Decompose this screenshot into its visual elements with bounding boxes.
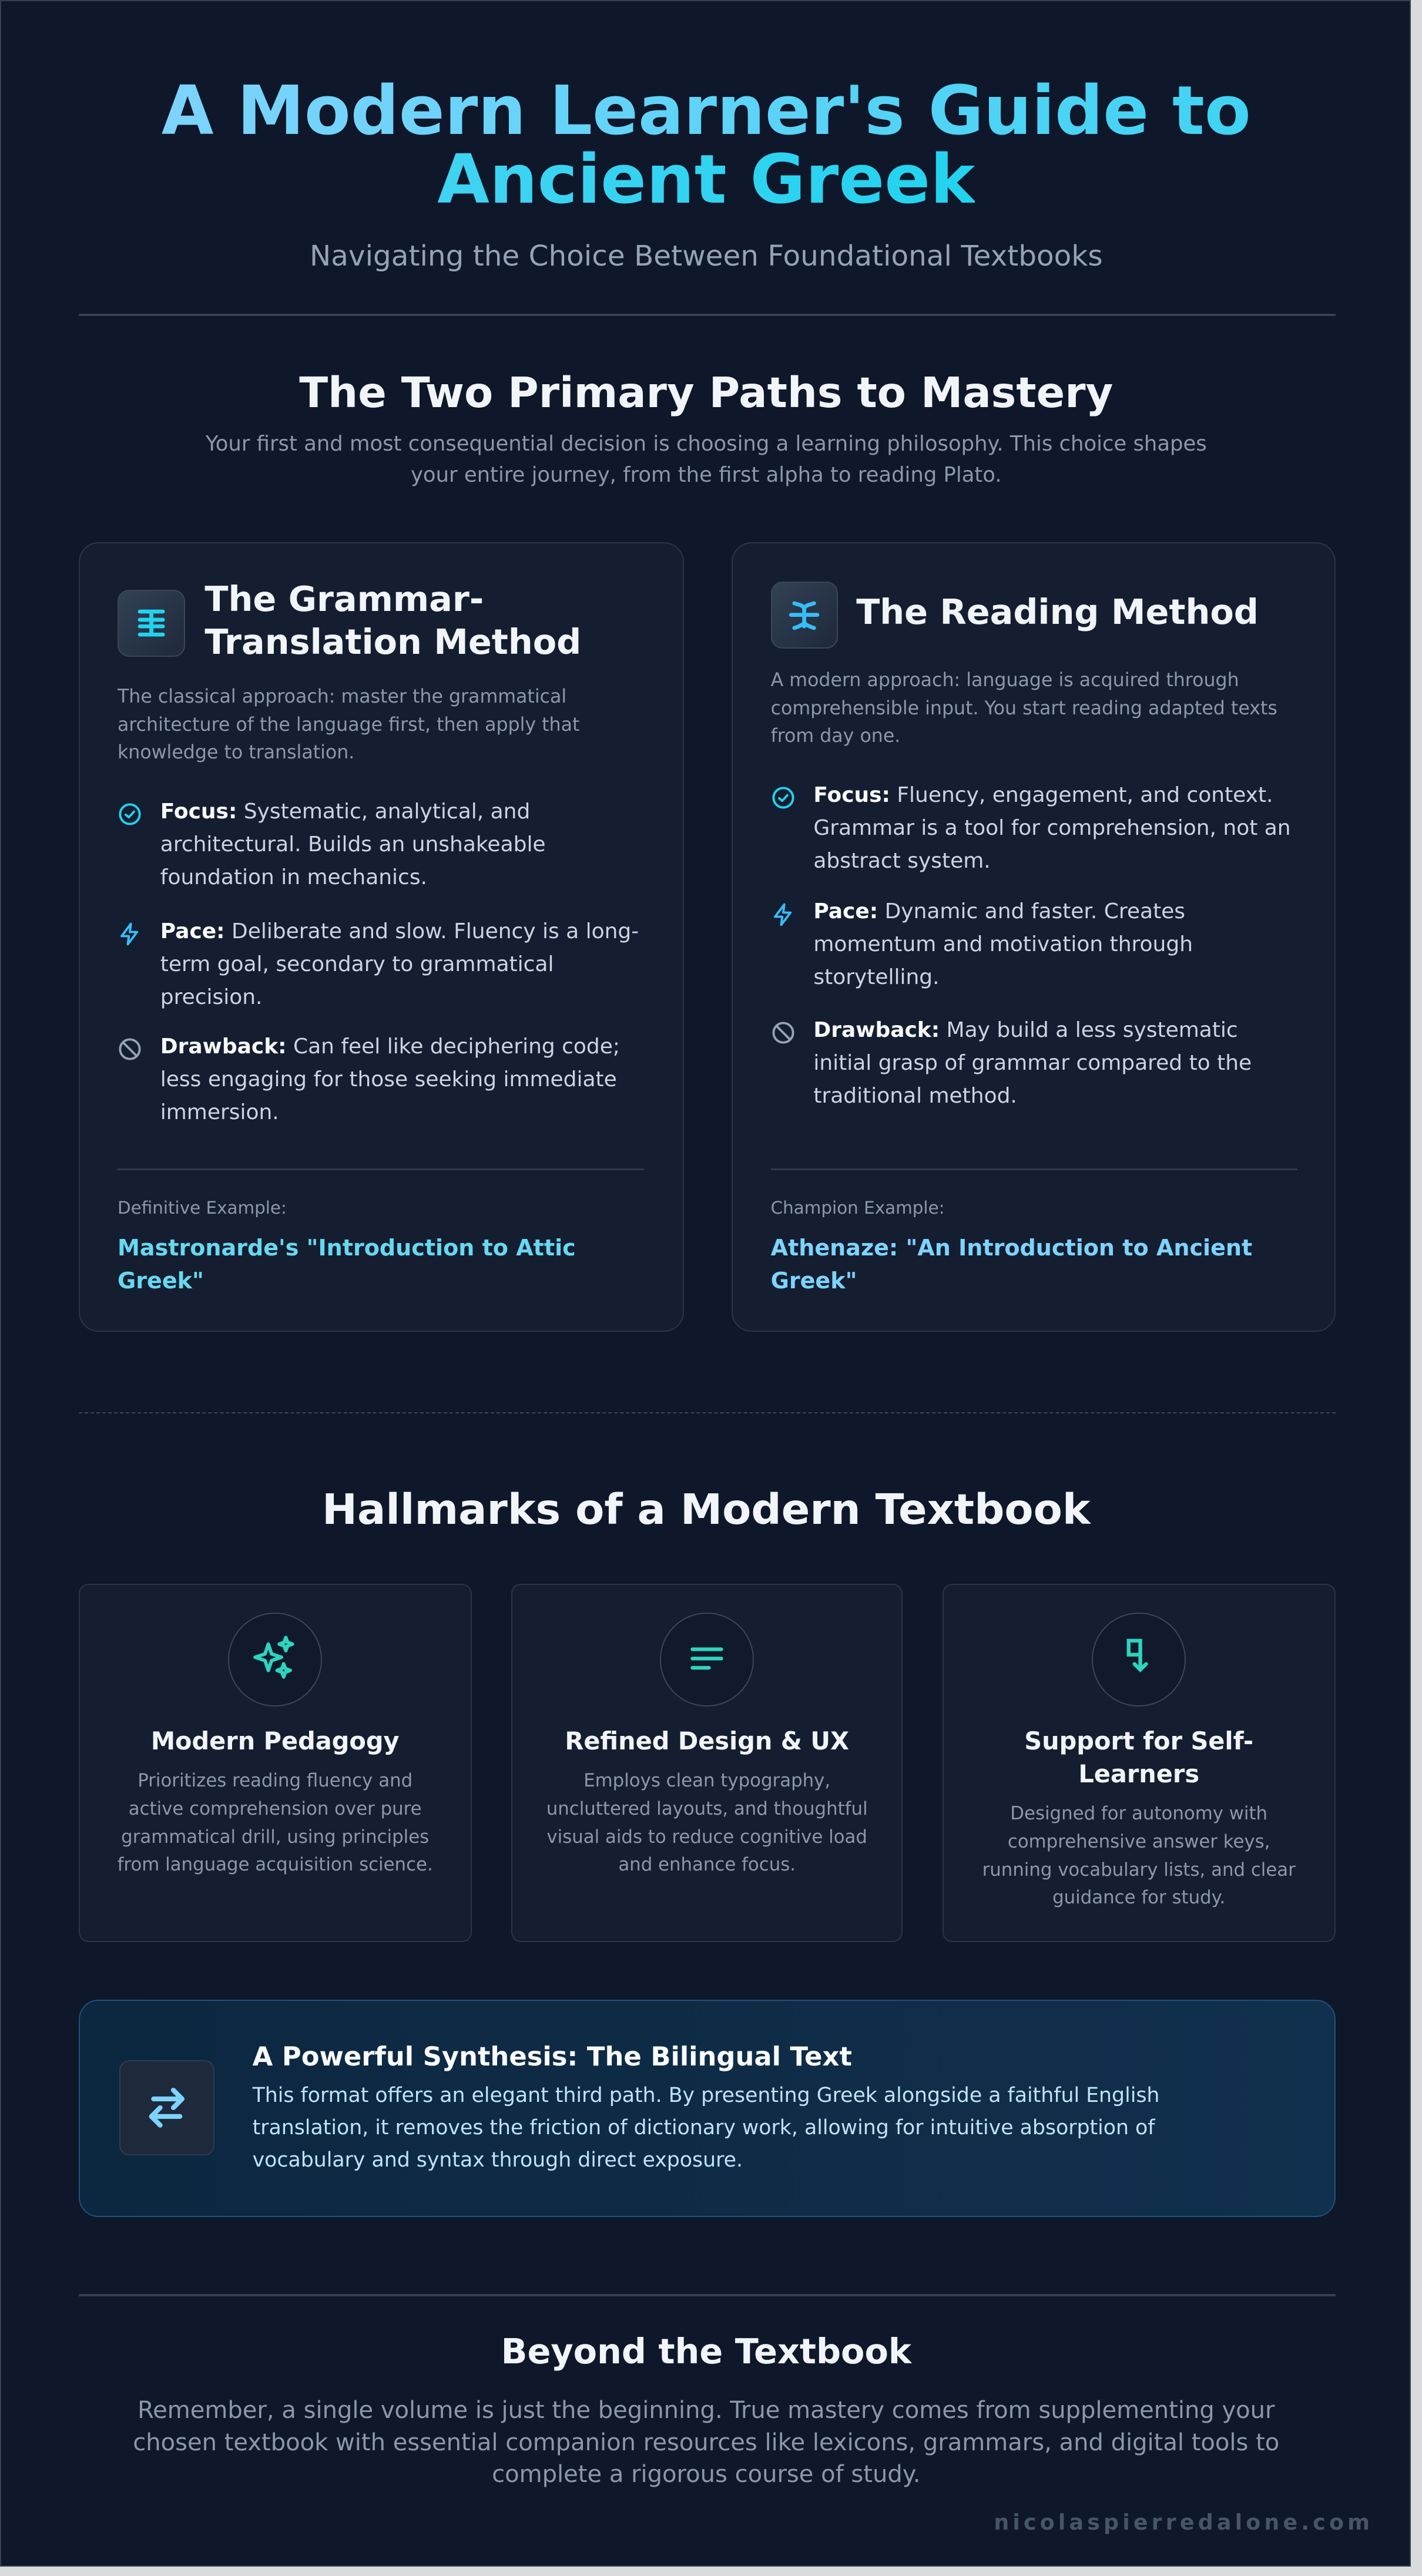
description: The classical approach: master the grammatical [118, 686, 566, 707]
text [118, 1770, 433, 1875]
example title [771, 1235, 1252, 1294]
callout: bilingual text [79, 2000, 1336, 2217]
description [118, 686, 579, 763]
bullet: drawback: immersion. [160, 1100, 279, 1124]
heading [204, 579, 581, 662]
title: Refined Design & UX [565, 1727, 849, 1755]
text: Designed for autonomy with [1010, 1803, 1267, 1824]
icon: grammar [118, 590, 185, 657]
closing paragraph: complete a rigorous course of study. [492, 2461, 920, 2488]
heading: The Grammar- [204, 579, 484, 619]
text: uncluttered layouts, and thoughtful [546, 1798, 868, 1819]
description: architecture of the language first, then apply that [118, 714, 579, 735]
description: A modern approach: language is acquired through [771, 670, 1239, 691]
heading: beyond: Beyond the Textbook [501, 2331, 911, 2372]
text: grammatical drill, using principles [121, 1826, 429, 1848]
text: comprehensive answer keys, [1008, 1831, 1270, 1852]
bullet: drawback: traditional method. [813, 1084, 1017, 1108]
text [982, 1803, 1296, 1908]
title [162, 72, 1251, 219]
example label: Definitive Example: [118, 1198, 287, 1218]
panel: grammar-translation card [79, 542, 684, 1332]
bullet: drawback: initial grasp of grammar compared to the [813, 1051, 1252, 1075]
icon: swap arrows [119, 2060, 214, 2155]
description: knowledge to translation. [118, 742, 354, 763]
text: Employs clean typography, [583, 1770, 830, 1791]
bullet: drawback [119, 1035, 620, 1124]
bullet: pace: momentum and motivation through [813, 932, 1193, 956]
bullet: pace: term goal, secondary to grammatical [160, 952, 554, 976]
bullet: pace: precision. [160, 985, 262, 1009]
bullet: focus [772, 783, 1291, 873]
example title: Mastronarde's "Introduction to Attic [118, 1235, 576, 1261]
description: comprehensible input. You start reading adapted texts [771, 698, 1277, 719]
bullet: focus: Grammar is a tool for comprehension, not an [813, 816, 1291, 840]
text [253, 2084, 1159, 2172]
panel: refined design [511, 1584, 903, 1942]
text: running vocabulary lists, and clear [982, 1859, 1296, 1880]
panel: reading method card [732, 542, 1336, 1332]
title: Support for Self- [1024, 1727, 1253, 1755]
text: visual aids to reduce cognitive load [546, 1826, 867, 1848]
bullet: pace: Pace: Deliberate and slow. Fluency is a long- [160, 919, 639, 943]
example label: Champion Example: [771, 1198, 945, 1218]
example title: Greek" [771, 1268, 857, 1294]
icon: lines [660, 1613, 754, 1707]
description [771, 670, 1277, 747]
example title [118, 1235, 576, 1294]
bullet: focus: architectural. Builds an unshakeable [160, 832, 546, 857]
title: Modern Pedagogy [151, 1727, 400, 1755]
text: This format offers an elegant third path. By presenting Greek alongside a faithful English [253, 2084, 1159, 2107]
title: A Modern Learner's Guide to [162, 72, 1251, 150]
bullet: drawback: less engaging for those seeking immediate [160, 1067, 617, 1091]
bullet: drawback: Drawback: May build a less systematic [813, 1018, 1238, 1042]
bullet: focus [119, 800, 546, 889]
title [1024, 1727, 1253, 1788]
text: guidance for study. [1052, 1887, 1225, 1908]
example title: Greek" [118, 1268, 204, 1294]
intro paragraph: Your first and most consequential decision is choosing a learning philosophy. This choice shapes [206, 432, 1207, 456]
bullet: pace [774, 899, 1193, 989]
text: and enhance focus. [618, 1854, 796, 1875]
bullet: pace [120, 919, 639, 1009]
heading: Translation Method [204, 622, 581, 662]
text: vocabulary and syntax through direct exposure. [253, 2148, 743, 2172]
bullet: pace: Pace: Dynamic and faster. Creates [813, 899, 1185, 923]
title: Ancient Greek [437, 140, 975, 219]
text: translation, it removes the friction of dictionary work, allowing for intuitive absorption of [253, 2116, 1155, 2140]
bullet: focus: Focus: Systematic, analytical, and [160, 800, 530, 824]
closing paragraph: chosen textbook with essential companion resources like lexicons, grammars, and digital tools to [133, 2429, 1279, 2456]
text [546, 1770, 868, 1875]
text: from language acquisition science. [118, 1854, 433, 1875]
heading: The Reading Method [856, 592, 1259, 632]
heading: two paths: The Two Primary Paths to Mastery [299, 368, 1113, 417]
text: active comprehension over pure [129, 1798, 422, 1819]
bullet: pace: storytelling. [813, 965, 940, 989]
text: Prioritizes reading fluency and [137, 1770, 412, 1791]
description: from day one. [771, 726, 900, 747]
subtitle: Navigating the Choice Between Foundational Textbooks [310, 240, 1103, 273]
closing paragraph [133, 2397, 1279, 2488]
heading: hallmarks: Hallmarks of a Modern Textbook [322, 1485, 1091, 1534]
bullet: focus: Focus: Fluency, engagement, and context. [813, 783, 1273, 807]
example title: Athenaze: "An Introduction to Ancient [771, 1235, 1252, 1261]
panel: self-learners [943, 1584, 1336, 1942]
bullet: drawback [772, 1018, 1252, 1108]
icon: reading [771, 582, 838, 649]
intro paragraph: your entire journey, from the first alpha to reading Plato. [411, 463, 1002, 487]
icon: download [1092, 1613, 1186, 1707]
intro paragraph [206, 432, 1207, 487]
title: Learners [1078, 1760, 1199, 1788]
closing paragraph: Remember, a single volume is just the beginning. True mastery comes from supplementing your [137, 2397, 1275, 2424]
bullet: focus: abstract system. [813, 849, 991, 873]
bullet: drawback: Drawback: Can feel like deciphering code; [160, 1035, 620, 1059]
panel: modern pedagogy [79, 1584, 472, 1942]
title: A Powerful Synthesis: The Bilingual Text [253, 2041, 852, 2072]
bullet: focus: foundation in mechanics. [160, 865, 427, 889]
footer: site: nicolaspierredalone.com [994, 2510, 1373, 2535]
icon: sparkles [228, 1613, 322, 1707]
